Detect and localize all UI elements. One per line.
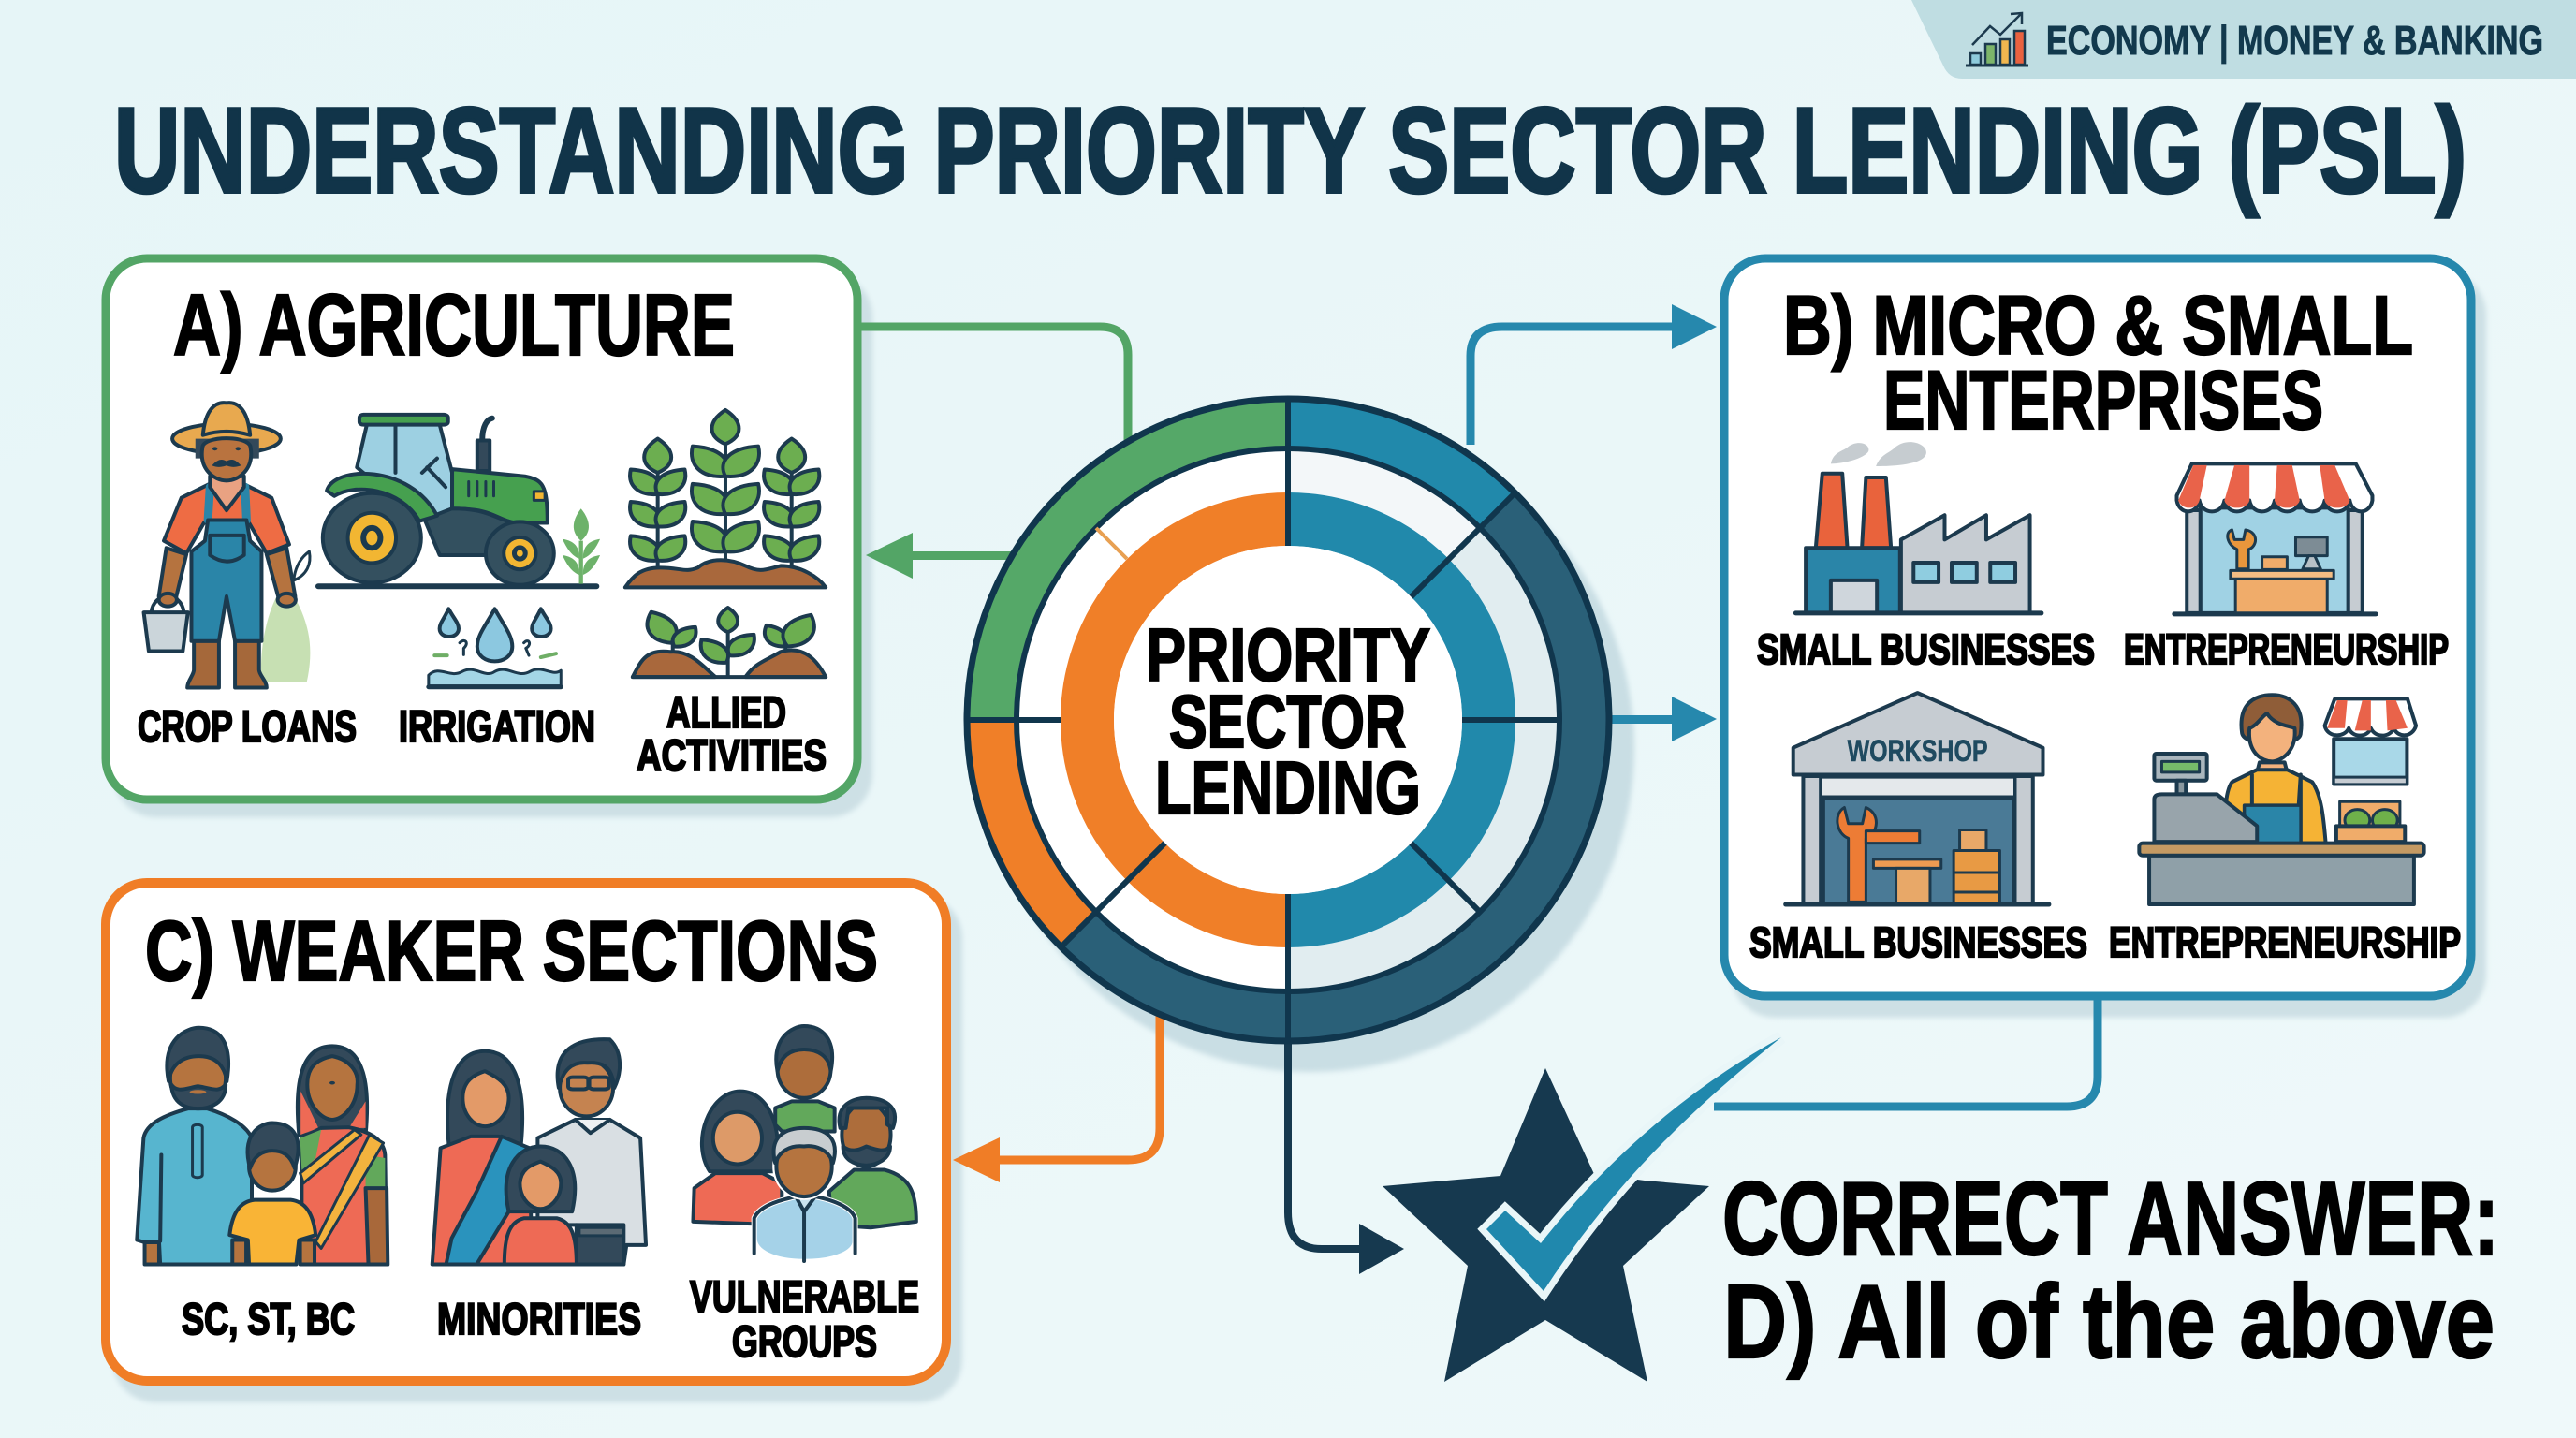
icon: seedlings	[633, 608, 826, 677]
icon: vulnerable groups	[693, 1026, 916, 1262]
centre label: PRIORITY	[1146, 613, 1430, 697]
icon: water drops	[429, 609, 561, 687]
arrow: agriculture connector out	[861, 327, 1128, 440]
centre ring chart	[966, 398, 1609, 1042]
arrow: centre to correct answer	[1288, 1044, 1404, 1274]
label: entrepreneurship top: ENTREPRENEURSHIP	[2124, 625, 2449, 673]
label: crop loans: CROP LOANS	[138, 701, 357, 751]
heading: micro and small enterprises: B) MICRO & SMALL	[1783, 278, 2413, 372]
top-right category tab	[1911, 0, 2576, 79]
label: small businesses bottom: SMALL BUSINESSES	[1749, 918, 2087, 966]
icon: rising bar chart	[1966, 13, 2028, 66]
heading: weaker sections: C) WEAKER SECTIONS	[145, 904, 878, 999]
icon: family minorities	[432, 1039, 646, 1265]
icon: family SC ST BC	[137, 1028, 388, 1265]
correct answer text	[1722, 1161, 2499, 1380]
icon: crop plants	[621, 410, 828, 587]
label: allied activities: ALLIED	[666, 687, 786, 737]
arrow: centre to micro and small enterprises top	[1471, 304, 1717, 445]
heading: agriculture: A) AGRICULTURE	[173, 276, 735, 374]
icon: farmer	[144, 403, 310, 688]
drop shadows	[112, 271, 2486, 1402]
label: vulnerable groups	[690, 1271, 919, 1366]
label: small businesses top: SMALL BUSINESSES	[1757, 625, 2095, 673]
heading: micro and small enterprises: ENTERPRISES	[1883, 353, 2323, 447]
label: vulnerable groups: VULNERABLE	[690, 1271, 919, 1321]
workshop sign: WORKSHOP	[1848, 734, 1988, 768]
arrow: centre to micro and small enterprises middle	[1605, 697, 1717, 741]
panel: B micro and small enterprises	[1724, 258, 2471, 996]
label: allied activities: ACTIVITIES	[637, 730, 827, 780]
arrow: centre to agriculture	[866, 533, 1020, 579]
panel: C weaker sections	[106, 883, 946, 1381]
label: SC, ST, BC: SC, ST, BC	[182, 1294, 355, 1343]
centre label: LENDING	[1155, 746, 1421, 829]
centre label	[1146, 613, 1430, 829]
label: vulnerable groups: GROUPS	[732, 1316, 877, 1366]
icon: shop front	[2174, 463, 2376, 614]
centre label: SECTOR	[1169, 680, 1406, 763]
label: minorities: MINORITIES	[437, 1294, 641, 1343]
icon: factory	[1795, 442, 2042, 613]
panel: A agriculture	[106, 258, 857, 800]
icon: shopkeeper	[2139, 695, 2424, 904]
label: irrigation: IRRIGATION	[399, 701, 595, 751]
connector: enterprises panel to check mark	[1714, 998, 2098, 1107]
arrow: centre to weaker sections	[953, 1013, 1160, 1182]
icon: star with check mark	[1383, 1037, 1781, 1382]
icon: workshop	[1786, 693, 2049, 904]
label: allied activities	[637, 687, 827, 780]
heading: micro and small enterprises	[1783, 278, 2413, 447]
label: entrepreneurship bottom: ENTREPRENEURSHIP	[2109, 918, 2461, 966]
icon: tractor	[318, 415, 600, 586]
